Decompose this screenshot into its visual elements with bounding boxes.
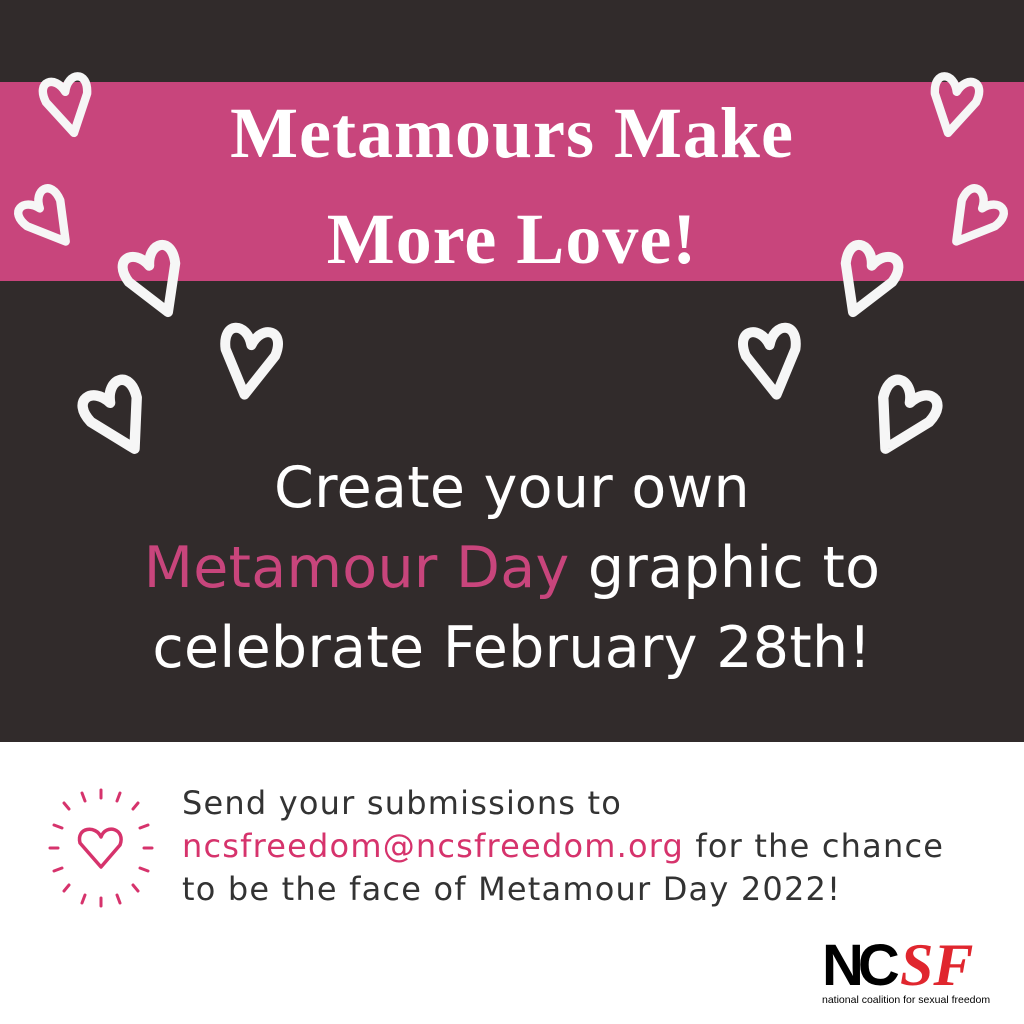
title: Metamours Make <box>230 93 794 173</box>
hearts decoration <box>14 72 1008 454</box>
submission text <box>182 784 944 908</box>
main message <box>144 455 880 681</box>
title: More Love! <box>327 199 697 279</box>
logo: NCSF: national coalition for sexual freedom <box>822 994 990 1006</box>
title <box>230 93 794 279</box>
submission text: Send your submissions to <box>182 784 622 822</box>
dark background panel <box>0 0 1024 742</box>
submission text: ncsfreedom@ncsfreedom.org for the chance <box>182 827 944 865</box>
icon: heart with rays <box>48 788 154 908</box>
logo: NCSF: SF <box>900 932 973 998</box>
pink band <box>0 82 1024 281</box>
logo: NCSF: NC <box>822 933 894 998</box>
main message: Create your own <box>274 455 750 521</box>
submission text: to be the face of Metamour Day 2022! <box>182 870 841 908</box>
main message: Metamour Day graphic to <box>144 535 880 601</box>
logo: NCSF <box>822 932 990 1006</box>
main message: celebrate February 28th! <box>152 615 872 681</box>
